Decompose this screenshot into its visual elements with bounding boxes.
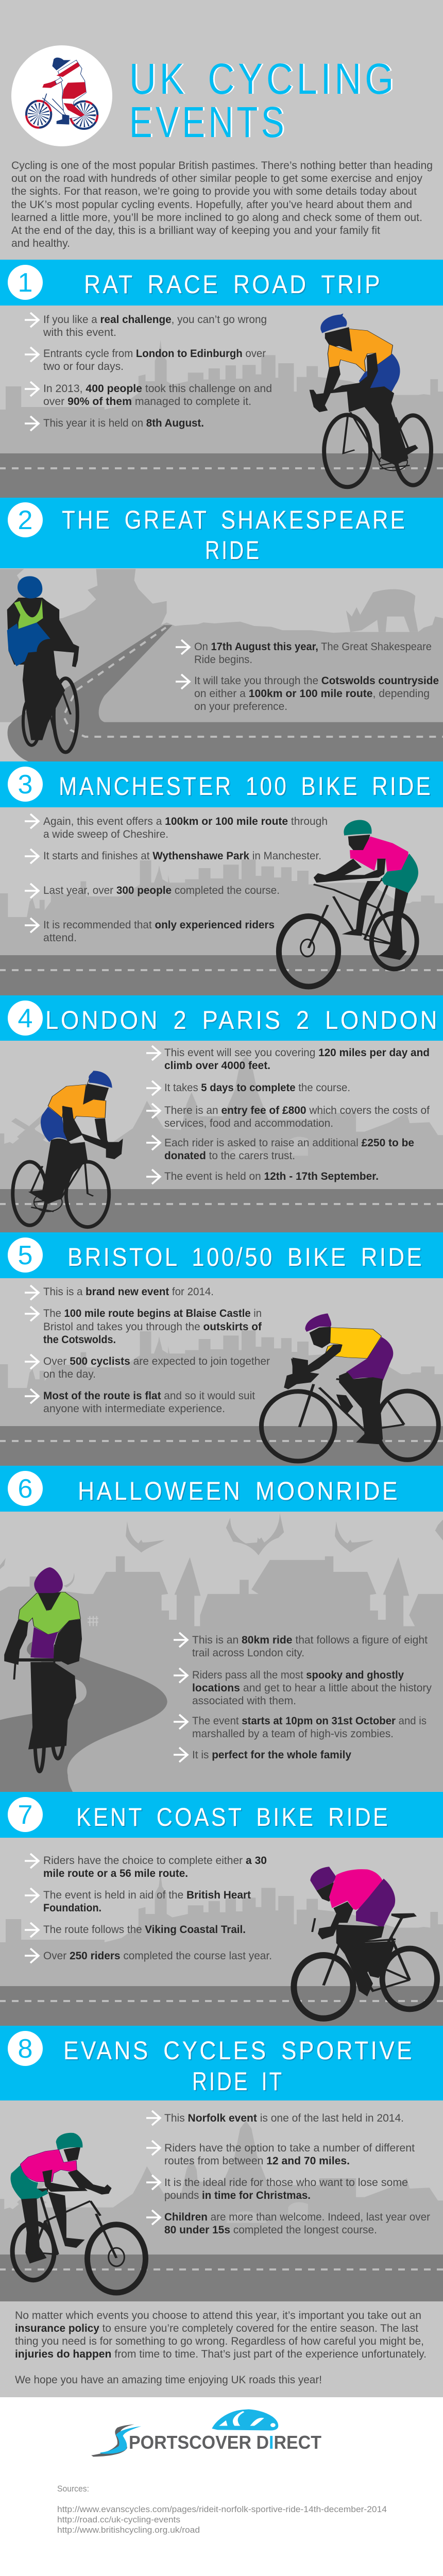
bullet list [25,1854,272,1963]
bullet list: This year it is held on 8th August. [43,417,204,429]
bullet list: services, food and accommodation. [164,1117,333,1129]
bullet list: Foundation. [43,1902,101,1914]
bullet list: This event will see you covering 120 miles per day and [164,1047,430,1059]
bullet list [25,313,272,431]
winding road [8,625,443,761]
closing text panel: injuries do happen from time to time. That’s just part of the experience unfortunately. [15,2348,427,2360]
bullet list: Each rider is asked to raise an additional £250 to be [164,1137,414,1149]
closing text panel: We hope you have an amazing time enjoying UK roads this year! [15,2374,322,2386]
bullet list: Riders have the option to take a number of different [164,2142,415,2154]
cyclist [13,1071,123,1227]
bullet list: Children are more than welcome. Indeed, last year over [164,2211,430,2223]
bullet list: marshalled by a team of high-vis zombies. [192,1728,394,1740]
bullet list: Riders have the choice to complete either a 30 [43,1855,267,1867]
city skyline [0,1330,443,1426]
closing text panel: thing you need is for something to go wrong. Regardless of how careful you might be, [15,2335,424,2347]
bullet list: routes from between 12 and 70 miles. [164,2155,350,2167]
bullet list: anyone with intermediate experience. [43,1403,225,1415]
bullet list: It takes 5 days to complete the course. [164,1082,350,1094]
bullet list: It is the ideal ride for those who want to lose some [164,2177,408,2189]
bullet list: If you like a real challenge, you can’t go wrong [43,314,267,326]
bullet list: This is an 80km ride that follows a figure of eight [192,1634,428,1646]
bullet list: pounds in time for Christmas. [164,2190,311,2201]
bullet list: with this event. [43,327,116,338]
intro text: learned a little more, you’ll be more inclined to go along and check some of them out. [11,212,422,224]
banner heading: 7 [18,1800,32,1830]
paris and london skyline [0,1055,443,1189]
bullet list: Again, this event offers a 100km or 100 mile route through [43,816,328,827]
panel: 1 Rat Race Road Trip [0,260,443,498]
banner heading [0,2026,443,2100]
title: UK CYCLING [129,55,397,103]
cyclist [294,1867,437,2019]
panel: 8 Evans Cycles Sportive Ride It [0,2026,443,2301]
bullet list [146,1046,430,1184]
bullet list [25,814,328,944]
banner heading: RIDE [205,536,261,565]
cyclist [4,1567,82,1771]
city skyline [0,859,443,955]
bullet list: Riders pass all the most spooky and ghostly [192,1669,404,1681]
sources: http://www.britishcycling.org.uk/road [57,2525,200,2535]
bullet list: Over 250 riders completed the course last year. [43,1950,272,1962]
banner heading: KENT COAST BIKE RIDE [76,1803,390,1832]
banner heading: 3 [18,770,32,800]
bullet list: It starts and finishes at Wythenshawe Park in Manchester. [43,850,321,862]
bullet list: The 100 mile route begins at Blaise Castle in [43,1308,262,1319]
bullet list: Entrants cycle from London to Edinburgh over [43,348,266,360]
bullet list: a wide sweep of Cheshire. [43,828,168,840]
intro text: out on the road with hundreds of other similar people to get some exercise and enjoy [11,173,422,184]
bullet list: Over 500 cyclists are expected to join together [43,1355,270,1367]
bullet list: on either a 100km or 100 mile route, depending [194,688,430,700]
bullet list: The route follows the Viking Coastal Trail. [43,1924,246,1936]
banner heading: RAT RACE ROAD TRIP [84,270,382,299]
bullet list: The event is held in aid of the British Heart [43,1889,251,1901]
bullet list: The event starts at 10pm on 31st October and is [192,1715,427,1727]
bullet list: attend. [43,932,77,944]
sources: http://road.cc/uk-cycling-events [57,2515,180,2524]
closing text panel: insurance policy to ensure you’re completely covered for the entire season. The last [15,2323,418,2334]
bullet list: Ride begins. [194,654,252,666]
intro text [11,160,433,249]
bullet list: This is a brand new event for 2014. [43,1286,214,1298]
bullet list: On 17th August this year, The Great Shakespeare [194,641,432,653]
bullet list: the Cotswolds. [43,1334,116,1346]
bullet list [174,1633,432,1762]
cyclist [261,1313,438,1461]
banner heading: 8 [18,2034,32,2064]
city skyline [0,340,443,453]
bullet list: donated to the carers trust. [164,1150,295,1162]
bullet list [176,640,439,713]
logo: Sportscover Direct: PORTSCOVER DIRECT [129,2432,321,2453]
cyclist [279,820,418,987]
bullet list: mile route or a 56 mile route. [43,1868,188,1879]
bullet list: This Norfolk event is one of the last held in 2014. [164,2112,404,2124]
bullet list: It will take you through the Cotswolds countryside [194,675,439,687]
bullet list: over 90% of them managed to complete it. [43,396,251,408]
haunted houses and bats scenery [0,1513,443,1792]
banner heading [0,995,443,1041]
bullet list: The event is held on 12th - 17th September. [164,1171,379,1182]
intro text: and healthy. [11,238,70,249]
icon: union jack cyclist badge [11,45,112,146]
banner heading: 6 [18,1474,32,1504]
title [129,55,397,146]
bullet list: climb over 4000 feet. [164,1060,270,1072]
banner heading: 5 [18,1241,32,1270]
banner heading [0,1792,443,1838]
banner heading: 4 [18,1004,32,1033]
bullet list: Bristol and takes you through the outskirts of [43,1321,262,1333]
bullet list: on your preference. [194,701,287,713]
banner heading [0,1466,443,1512]
panel: 6 Halloween Moonride [0,1466,443,1792]
cyclist [7,576,79,752]
cyclist [310,313,431,487]
banner heading: 2 [18,505,32,535]
bullet list [25,1285,270,1415]
panel: 7 Kent Coast Bike Ride [0,1792,443,2026]
banner heading [0,1232,443,1278]
closing text panel [0,2301,443,2397]
panel: 5 Bristol 100/50 Bike Ride [0,1232,443,1466]
bullet list: Most of the route is flat and so it would suit [43,1390,255,1402]
closing text panel: No matter which events you choose to attend this year, it’s important you take out an [15,2310,421,2321]
bullet list: two or four days. [43,361,124,372]
city skyline [0,1873,443,1986]
header panel [0,0,443,260]
panel: 2 The Great Shakespeare Ride [0,498,443,761]
bullet list: locations and get to hear a little about the history [192,1682,432,1694]
sources: Sources: [57,2484,89,2494]
intro text: At the end of the day, this is a brilliant way of keeping you and your family fit [11,225,380,236]
bullet list: It is perfect for the whole family [192,1749,351,1761]
logo: Sportscover Direct [91,2409,321,2457]
banner heading [0,761,443,807]
banner heading [0,498,443,568]
bullet list: Last year, over 300 people completed the course. [43,885,280,896]
sources [57,2484,387,2535]
bullet list: trail across London city. [192,1647,304,1659]
panel: 4 London 2 Paris 2 London [0,995,443,1232]
bullet list: on the day. [43,1368,96,1380]
intro text: Cycling is one of the most popular British pastimes. There’s nothing better than heading [11,160,433,172]
paris and london skyline [0,2121,443,2255]
panel: 3 Manchester 100 Bike Ride [0,761,443,995]
banner heading: 1 [18,268,32,298]
bullet list: There is an entry fee of £800 which covers the costs of [164,1105,430,1116]
bullet list: In 2013, 400 people took this challenge on and [43,383,272,395]
banner heading: HALLOWEEN MOONRIDE [78,1477,400,1505]
title: EVENTS [129,98,287,146]
cyclist [10,2133,145,2293]
intro text: the sights. For that reason, we’re going to provide you with some details today about [11,185,417,197]
banner heading [0,260,443,306]
bullet list [146,2111,430,2236]
intro text: the UK’s most popular cycling events. Hopefully, after you’ve heard about them and [11,199,412,211]
bullet list: It is recommended that only experienced riders [43,919,275,931]
bullet list: associated with them. [192,1695,296,1707]
tree, grass and deer scenery [0,569,443,722]
sources: http://www.evanscycles.com/pages/rideit-norfolk-sportive-ride-14th-december-2014 [57,2504,387,2514]
banner heading: RIDE IT [192,2067,284,2096]
bullet list: 80 under 15s completed the longest course. [164,2224,377,2236]
winding road [0,1641,167,1792]
